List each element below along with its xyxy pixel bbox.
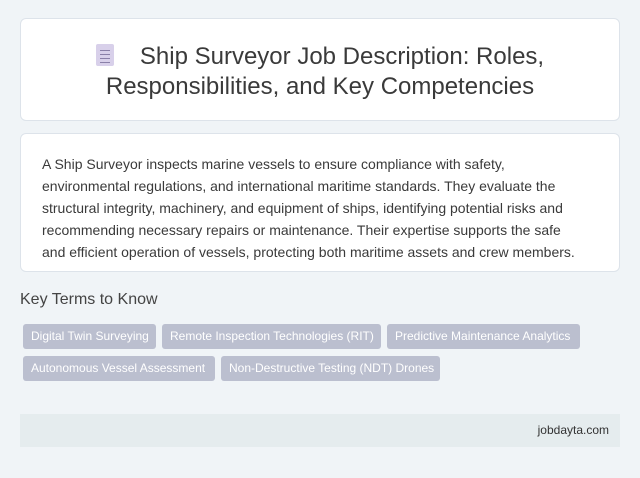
tag 3: Predictive Maintenance Analytics [395, 329, 570, 343]
tag 5 [221, 356, 440, 381]
tag 2 [162, 324, 381, 349]
tag 4: Autonomous Vessel Assessment [31, 361, 205, 375]
description text: A Ship Surveyor inspects marine vessels to ensure compliance with safety, environmental regulations, and international maritime standards. They evaluate the structural integrity, machinery, and equipment of ships, identifying potential risks and recommending necessary repairs or maintenance. Their expertise supports the safe and efficient operation of vessels, protecting both maritime assets and crew members. [42, 156, 575, 260]
footer text: jobdayta.com [538, 423, 609, 437]
title card [20, 18, 620, 121]
tag 2: Remote Inspection Technologies (RIT) [170, 329, 374, 343]
heading: key terms: Key Terms to Know [20, 291, 158, 308]
tag 1: Digital Twin Surveying [31, 329, 149, 343]
footer [20, 414, 620, 447]
title: Ship Surveyor Job Description: Roles, [140, 43, 544, 70]
icon: document [96, 44, 114, 66]
title [96, 43, 544, 100]
tag 5: Non-Destructive Testing (NDT) Drones [229, 361, 434, 375]
title: Responsibilities, and Key Competencies [106, 73, 534, 100]
description card [20, 133, 620, 272]
tag 1 [23, 324, 156, 349]
tag 4 [23, 356, 215, 381]
tags [23, 324, 580, 381]
tag 3 [387, 324, 580, 349]
